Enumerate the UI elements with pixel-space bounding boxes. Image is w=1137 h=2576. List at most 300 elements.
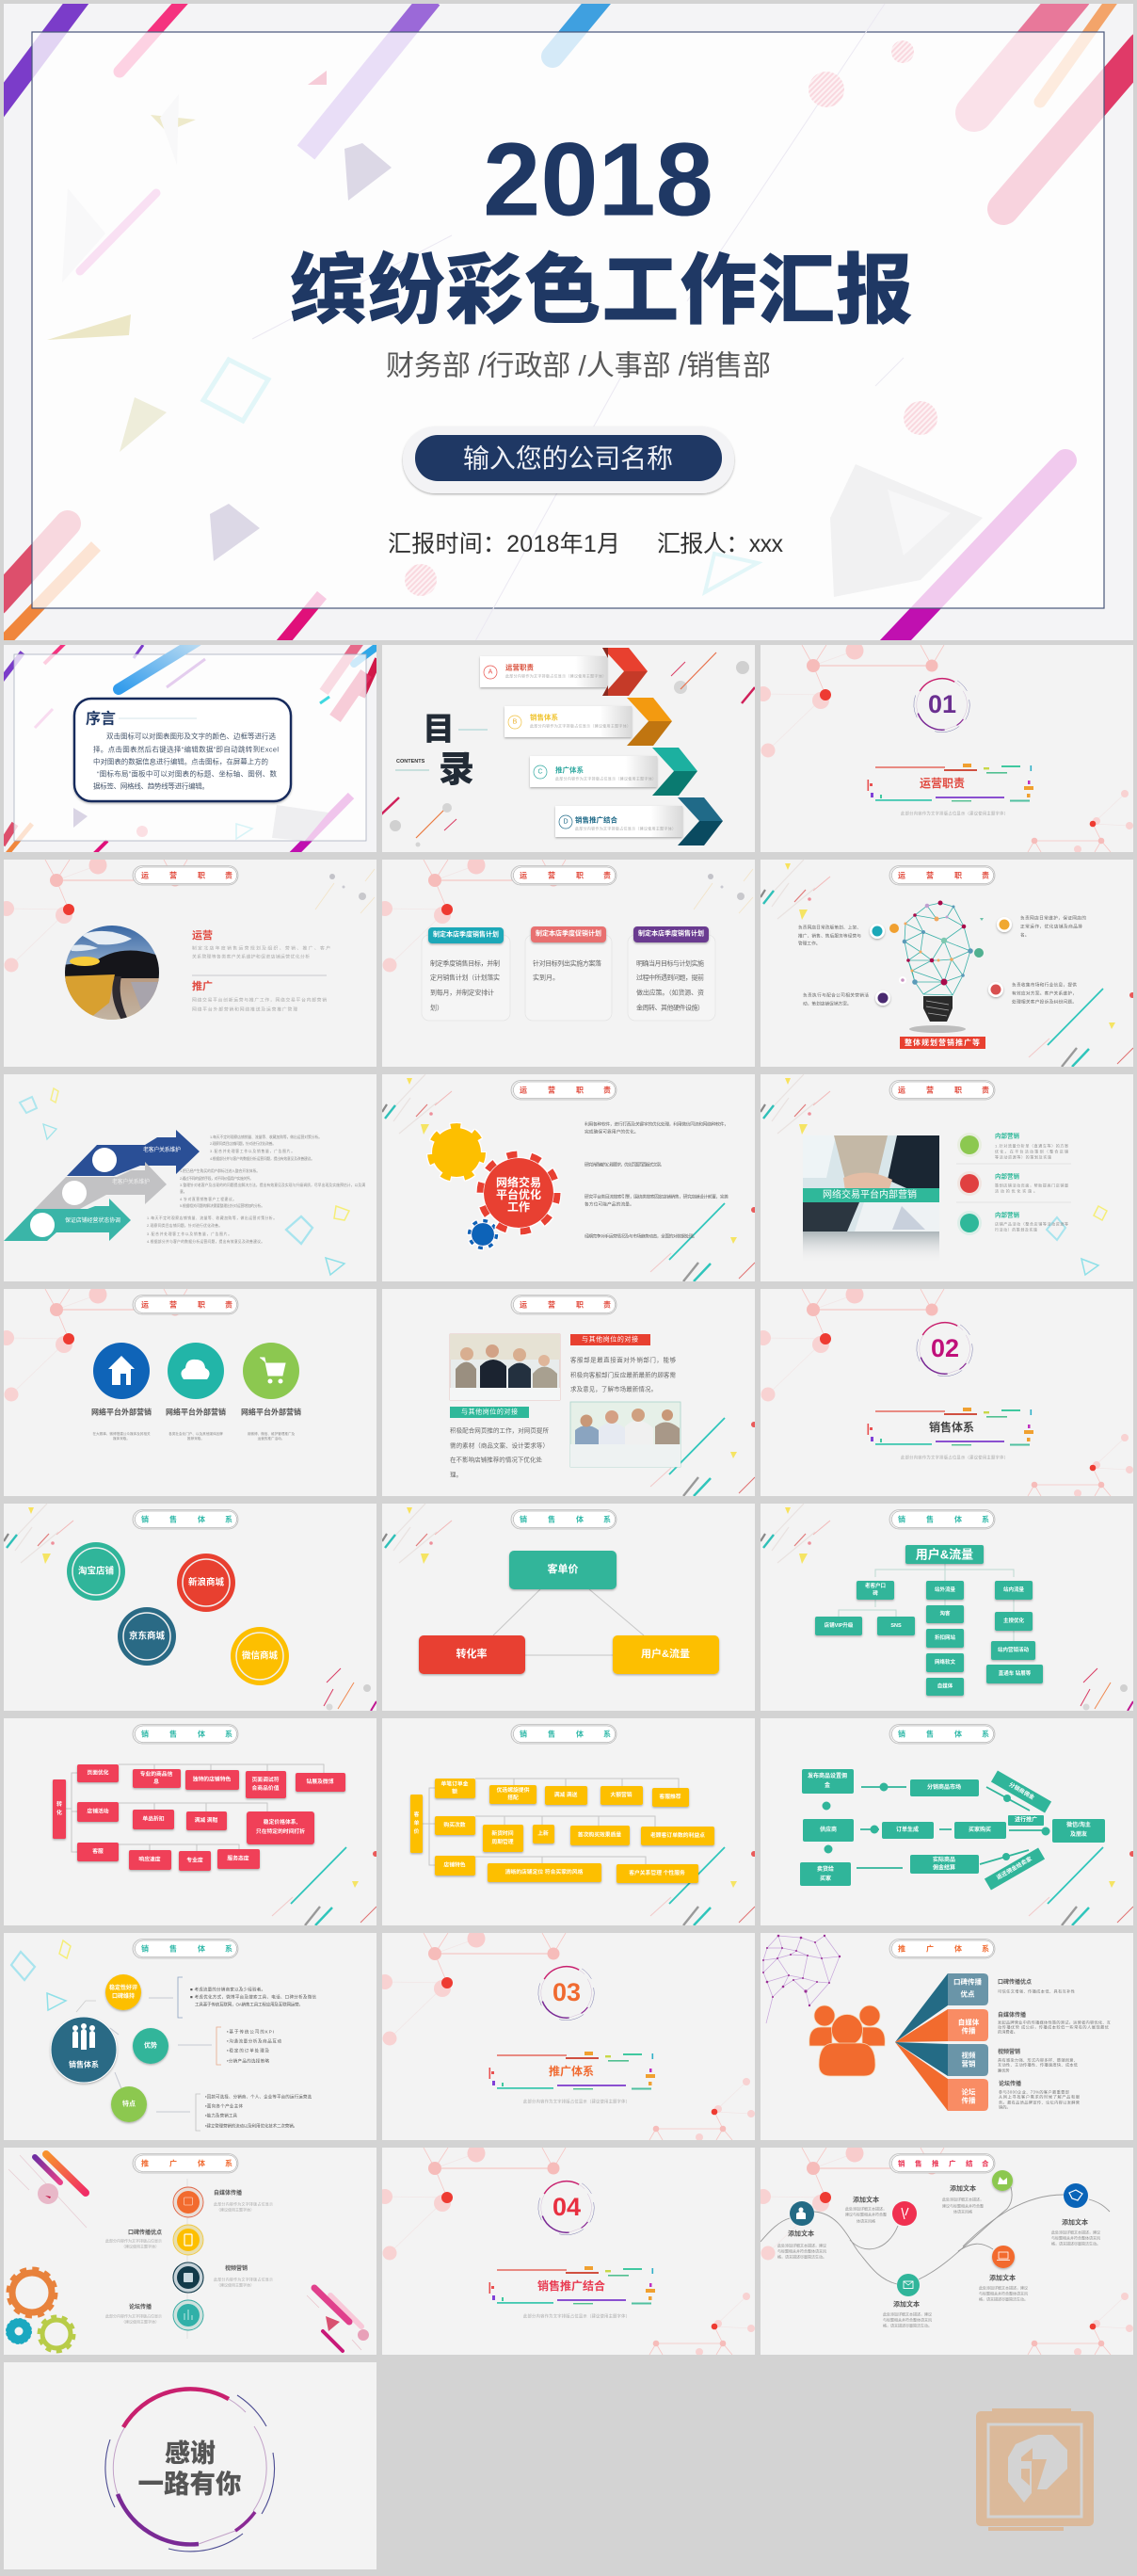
node boxes: 淘客	[939, 1610, 951, 1618]
panel: team photos slide	[382, 1289, 757, 1496]
red label	[570, 1334, 650, 1345]
arrow text blocks: 意。	[180, 1189, 187, 1194]
arrow: navy	[67, 1130, 200, 1176]
unit price node boxes: 客服推荐	[659, 1793, 681, 1800]
conversion node boxes: 页面调试符	[252, 1776, 280, 1783]
text block: reputation: 工具基于传统互联网，OA销售工具工程应用及互联网运营。	[195, 2002, 303, 2007]
heading pill: 销售体系	[520, 1729, 611, 1738]
heading: 目	[423, 712, 455, 748]
red label: 与其他岗位的对接	[582, 1335, 638, 1343]
unit price node boxes: 额	[452, 1787, 457, 1795]
unit price node boxes: 上新	[537, 1829, 549, 1837]
node boxes: 站内营销活动	[998, 1646, 1029, 1653]
panel: section 02 slide	[756, 1286, 1133, 1497]
bulb illustration	[903, 900, 973, 1033]
panel: operations and promotion slide	[0, 857, 376, 1067]
circle: wechat: 微信商城	[242, 1650, 278, 1661]
text: operations: 关系管理等各类客户关系维护和促进店铺运营优化分析	[192, 953, 310, 960]
channel descriptions: 具有感染力强、形式内容多样、肢端创意、	[998, 2056, 1078, 2064]
decorative outlines	[1047, 1206, 1107, 1275]
section note: 此部分内容作为文字排版占位显示（建议使用主题字体）	[523, 2312, 630, 2320]
root box: 用户&流量	[916, 1548, 973, 1561]
arrow text blocks: 2.观察同类目店铺问题，针对进行优化改善。	[210, 1141, 276, 1146]
heading pill: 运营职责	[520, 1299, 611, 1309]
green banner: 网络交易平台内部营销	[823, 1188, 917, 1200]
text block 6: 与标题相关并符合整体语言风	[883, 2316, 932, 2322]
circle: jd	[118, 1607, 176, 1666]
channel descriptions: 廉优势	[998, 2068, 1010, 2073]
column: cart: 用微博、微信、维护管理推广及	[248, 1431, 296, 1436]
heading pill: 销售体系	[141, 1514, 232, 1523]
unit price node boxes: 优选螺旋提供	[497, 1786, 530, 1794]
panel: thank you slide	[4, 2362, 376, 2569]
green label	[450, 1407, 529, 1418]
node 2: （建议使用主题字体）	[121, 2243, 159, 2248]
section note: 此部分内容作为文字排版占位显示（建议使用主题字体）	[523, 2098, 630, 2105]
image: snow sunset	[65, 926, 159, 1020]
column: cart: 运营的推广活动。	[258, 1436, 284, 1441]
conversion node boxes: 只在特定的时间打折	[256, 1827, 305, 1835]
red gear with label: 工作	[507, 1199, 530, 1214]
heading pill	[133, 1940, 238, 1958]
panel: three plan cards slide	[377, 857, 755, 1067]
panel: contents slide	[381, 645, 755, 852]
node: branch	[892, 2201, 917, 2226]
conversion node boxes	[53, 1764, 345, 1871]
departments: 财务部 /行政部 /人事部 /销售部	[386, 350, 771, 382]
text block 6: 此处添加详细文本描述，建议	[883, 2310, 932, 2316]
text blocks: 正常运作，优化店铺及商品排	[1020, 923, 1082, 930]
arrow: teal	[4, 1199, 131, 1241]
card 1: 制定季度销售目标，并制	[430, 958, 500, 968]
node boxes: 网络软文	[935, 1658, 955, 1666]
item D: 此部分内容作为文字排版占位显示（建议使用主题字体）	[575, 825, 676, 830]
item A: 此部分内容作为文字排版占位显示（建议使用主题字体）	[505, 672, 606, 678]
preface box: 择。点击图表然后右键选择“编辑数据”即自动跳转到Excel	[93, 744, 279, 753]
text block: reputation	[190, 1987, 316, 2007]
card 2: 制定本店季度促销计划	[536, 928, 601, 938]
flow node boxes: 分销商品市场	[927, 1783, 961, 1791]
item 1: 优化。在平台活动策划（整合店铺	[995, 1149, 1068, 1154]
text block: reputation: ■ 考虑流量的分销商家以及少经验者。	[190, 1987, 265, 1992]
section number: 03	[552, 1978, 581, 2006]
text block 1	[777, 2230, 826, 2260]
circle: wechat	[231, 1627, 289, 1685]
item A: 运营职责	[505, 663, 534, 672]
conversion node boxes: 转	[56, 1800, 62, 1808]
text block: advantages: •沟通流量分析及商品互动	[227, 2037, 282, 2045]
text block 4: 与标题相关并符合整体语言风	[1051, 2235, 1100, 2241]
node: team	[790, 2201, 814, 2226]
flow node boxes	[800, 1769, 1105, 1886]
card 1	[422, 927, 510, 1021]
fan segments	[895, 1973, 948, 2111]
connecting curves	[761, 2187, 1110, 2284]
panel: three arrows slide	[4, 1074, 376, 1281]
panel: preface slide	[1, 641, 378, 856]
text block 4: 此处添加详细文本描述，建议	[1051, 2230, 1100, 2235]
arrow: grey: 老客户关系维护	[112, 1178, 150, 1185]
channel descriptions: 视频营销	[998, 2048, 1020, 2055]
unit price node boxes: 大额营销	[610, 1791, 633, 1798]
text block: left	[450, 1425, 550, 1478]
panel: section 01 slide	[756, 642, 1133, 853]
column: house: 媒体采取。	[113, 1436, 130, 1441]
flow node boxes: 买家购买	[969, 1826, 991, 1833]
preface box: “图标布局”面板中可以对图表的标题、坐标轴、图例、数	[97, 768, 277, 778]
node 4: 此部分内容作为文字排版占位显示	[105, 2312, 162, 2318]
flow node boxes: 及朋友	[1070, 1830, 1087, 1838]
conversion node boxes: 化	[56, 1809, 62, 1816]
text block: right: 积极向客服部门反应最新最新的顾客需	[570, 1371, 676, 1378]
heading: 录	[439, 750, 474, 790]
item A: A	[488, 668, 493, 676]
node 4: （建议使用主题字体）	[121, 2318, 159, 2324]
text block 3: 体语言风格	[953, 2209, 972, 2214]
channel descriptions: 从网上寻找客户需求的时候了解产品和服	[999, 2094, 1081, 2100]
unit price node boxes: 搭配	[507, 1794, 519, 1801]
text block 6: 格，语言描述尽量简洁生动。	[883, 2322, 932, 2327]
channel box 4: 论坛	[962, 2086, 976, 2096]
text block 2: 体语言风格	[857, 2218, 875, 2224]
column: house	[91, 1343, 152, 1441]
arrow text blocks: 3.配合并处理客工作以及销售量，广告图片。	[210, 1149, 295, 1153]
heading: CONTENTS	[396, 759, 425, 765]
conversion node boxes: 合商品价值	[252, 1784, 280, 1792]
node: reputation: 稳定性好评	[109, 1984, 137, 1991]
heading pill: 销售体系	[898, 1514, 989, 1523]
text block 5: 格，语言描述尽量简洁生动。	[979, 2295, 1028, 2301]
node 4: 论坛传播	[129, 2303, 152, 2310]
node 2: 此部分内容作为文字排版占位显示	[105, 2237, 162, 2243]
column: house: 在大赛事、微博搭建公众媒体及其相关	[92, 1431, 151, 1436]
text block: left: 理。	[450, 1471, 462, 1478]
flow node boxes: 订单生成	[896, 1826, 919, 1833]
flow node boxes: 供应商	[820, 1826, 837, 1833]
channel descriptions: 互动性、主动传播性、传播速度快、成本低	[998, 2062, 1079, 2068]
channel box 2: 自媒体	[958, 2017, 980, 2026]
section number: 02	[931, 1334, 959, 1362]
box: traffic: 用户&流量	[641, 1647, 690, 1660]
section title: 运营职责	[920, 776, 965, 790]
node: chart	[992, 2170, 1013, 2191]
item C	[530, 748, 697, 796]
channel descriptions: 自媒体传播	[998, 2011, 1026, 2019]
card 2	[525, 926, 612, 1021]
node boxes: 店铺VIP升级	[825, 1621, 854, 1629]
panel: cover slide	[0, 0, 1137, 650]
text block 1: 添加文本	[788, 2230, 814, 2237]
node 3: 此部分内容作为文字排版占位显示	[214, 2277, 273, 2282]
panel: sales system mind map slide	[4, 1933, 376, 2140]
item 3: 店铺产品活动（整合店铺等活动资源等	[995, 1220, 1068, 1226]
node boxes: 老客户口	[865, 1582, 886, 1589]
heading pill: 销售体系	[898, 1729, 989, 1738]
section number: 04	[552, 2193, 581, 2221]
diagonal banner: commission: 分销商佣金	[1008, 1780, 1035, 1801]
card 3: 做出应策。（如货源、资	[636, 989, 704, 996]
flow connectors	[823, 1783, 1049, 1868]
text: promotion: 推广	[192, 979, 213, 992]
channel descriptions: 可信任文增强、传播成本低、具有互补性	[998, 1988, 1075, 1994]
text blocks: 负责网店日常改版策划、上架、	[798, 925, 861, 930]
panel: traffic tree slide	[761, 1504, 1133, 1711]
heading pill: 销售推广结合	[898, 2158, 989, 2167]
report time: 汇报时间：2018年1月	[388, 531, 620, 557]
channel descriptions: 动传播优势 成公好，传播成本较低一些常有的人展现最优	[998, 2024, 1109, 2030]
node boxes	[815, 1581, 1043, 1696]
text block 3: 建议与标题相关并符合整	[942, 2203, 984, 2209]
panel: triangle diagram slide	[382, 1504, 755, 1711]
node boxes: 自媒体	[937, 1682, 953, 1689]
arrow text blocks: 1.每天不定时观察店铺销量、流量等、收藏加购等，做出运营对策分析。	[210, 1135, 322, 1139]
text blocks: 管理工作。	[798, 940, 820, 947]
heading pill	[889, 1510, 995, 1529]
channel box 4	[948, 2079, 988, 2111]
text block: features	[205, 2094, 312, 2130]
text block: features: •回款可选择、分销商、个人、企业等平台的运行运营选	[205, 2094, 312, 2100]
heading pill	[133, 1296, 238, 1314]
text block 3	[942, 2184, 984, 2214]
card 2: 实到月。	[533, 974, 559, 981]
unit price node boxes: 满减 满送	[554, 1791, 578, 1798]
conversion node boxes: 息	[153, 1778, 159, 1785]
text block 6: 添加文本	[893, 2299, 920, 2309]
text block: advantages: •稳定的订单处理及	[227, 2047, 269, 2054]
flow node boxes: 发布商品设置佣	[808, 1772, 847, 1779]
arrow: teal: 保证店铺经营状态协调	[65, 1216, 120, 1224]
node: reputation	[105, 1974, 141, 2010]
node: advantages	[133, 2028, 168, 2064]
item B	[504, 698, 672, 746]
top left decoration	[8, 2154, 87, 2228]
conversion node boxes: 响应速度	[138, 1855, 161, 1862]
section note: 此部分内容作为文字排版占位显示（建议使用主题字体）	[901, 810, 1008, 817]
item 3: 行活动）的策划及实施	[995, 1226, 1037, 1232]
heading pill: 推广体系	[141, 2158, 232, 2167]
diagonal banner: commission	[991, 1770, 1051, 1813]
preface box: 中对图表的数据信息进行编辑。点击图标，在屏幕上方的	[93, 757, 268, 766]
yellow gear	[430, 1126, 483, 1179]
panel: sales and promotion curve slide	[756, 2145, 1133, 2356]
heading	[395, 712, 488, 790]
text blocks: 利用各种软件，进行打西及关键字的优化处理，利用微信同流和网络种软件，	[585, 1120, 729, 1128]
item D: 销售推广结合	[575, 815, 617, 825]
unit price node boxes: 单	[414, 1819, 420, 1827]
item C: C	[537, 768, 543, 776]
panel: unit price tree slide	[382, 1718, 757, 1925]
node boxes: SNS	[890, 1623, 902, 1629]
item B: 销售体系	[530, 712, 558, 721]
heading pill: 运营职责	[141, 870, 232, 879]
flow node boxes: 进行推广	[1015, 1815, 1037, 1823]
main year: 2018	[483, 122, 713, 237]
panel: three circle icons slide	[0, 1286, 376, 1496]
arrow text blocks	[147, 1135, 365, 1244]
text block 2: 添加文本	[853, 2196, 879, 2203]
channel descriptions: 论坛传播	[999, 2080, 1021, 2087]
unit price node boxes: 清晰的店铺定位 符合买家的风格	[505, 1868, 584, 1876]
node: features: 特点	[122, 2100, 136, 2107]
card 3: 制定本店季度销售计划	[638, 928, 704, 938]
text blocks: 完成确保可靠用户的优化。	[585, 1128, 639, 1135]
item D: D	[563, 819, 568, 825]
panel: word of mouth channels slide	[761, 1933, 1133, 2140]
column: cloud: 推荐采取。	[187, 1436, 204, 1441]
heading pill	[133, 2154, 238, 2173]
unit price node boxes: 单笔订单金	[440, 1779, 469, 1787]
arrow: grey	[35, 1162, 167, 1209]
text block 2: 此处添加详细文本描述，	[845, 2205, 887, 2211]
decorative dots and strokes	[381, 652, 755, 847]
red caption: 整体规划营销推广等	[905, 1038, 981, 1047]
green label: 与其他岗位的对接	[461, 1407, 518, 1416]
card 1: 定月销售计划（计划落实	[430, 974, 500, 981]
conversion node boxes: 钻展及微博	[307, 1778, 334, 1785]
item 1	[957, 1132, 1068, 1160]
text blocks: 推广、销售、售后服务等经营与	[798, 932, 861, 940]
gears	[7, 2269, 73, 2352]
card 3: 金周转、其他硬件设施）	[636, 1004, 704, 1011]
box: conversion: 转化率	[456, 1647, 488, 1660]
node 2	[105, 2225, 203, 2255]
card 3	[628, 926, 715, 1021]
arrow: navy: 老客户关系维护	[143, 1146, 181, 1153]
channel descriptions: 参与3000企业、73%的客户最重要部	[999, 2088, 1069, 2096]
network graphic	[762, 1935, 841, 2023]
icon: watermark stamp	[976, 2408, 1094, 2531]
node 3: （建议使用主题字体）	[216, 2282, 254, 2288]
blue bar	[119, 641, 197, 689]
text block 4	[1051, 2218, 1100, 2246]
section title: 销售体系	[929, 1420, 974, 1434]
heading pill	[511, 1296, 617, 1314]
channel box 2	[948, 2009, 988, 2041]
text block: advantages: •基于传统公司的KPI	[227, 2028, 274, 2036]
text block 5	[979, 2273, 1028, 2301]
column: cloud	[166, 1343, 226, 1441]
arrow text blocks: 2.观察同类目店铺问题，针对进行优化改善。	[147, 1223, 222, 1228]
text block 4: 添加文本	[1062, 2218, 1088, 2226]
card 1: 到每月，并制定安排计	[430, 989, 494, 996]
text block: left: 积极配合网页推的工作，对网页提所	[450, 1425, 550, 1435]
column: cart: 网络平台外部营销	[241, 1407, 301, 1416]
node boxes: 碑	[873, 1589, 878, 1597]
flow node boxes: 卖货给	[817, 1865, 834, 1873]
channel descriptions: 口碑传播优点	[998, 1978, 1032, 1986]
node 1: 此部分内容作为文字排版占位显示	[214, 2201, 273, 2207]
column: cloud: 各类社会化门户、以及其他媒体品牌	[168, 1431, 223, 1436]
text block: right	[570, 1356, 676, 1393]
conversion node boxes: 店铺活动	[87, 1808, 109, 1815]
text block: left: 在不影响店铺推荐的情况下优化处	[450, 1456, 542, 1463]
blue gear	[469, 1220, 497, 1248]
root box	[905, 1545, 984, 1564]
diagonal colour bars	[0, 0, 1137, 650]
item C: 推广体系	[555, 765, 584, 774]
card 3: 明确当月目标与计划实施	[636, 958, 704, 968]
node 3	[173, 2262, 273, 2293]
conversion node boxes: 页面优化	[87, 1768, 109, 1776]
panel: sales channel circles slide	[4, 1504, 376, 1711]
red gear with label	[480, 1154, 557, 1232]
flow node boxes: 金	[825, 1781, 830, 1789]
node: handshake	[1064, 2183, 1088, 2208]
box: unit price: 客单价	[548, 1562, 578, 1575]
channel box 1: 口碑传播	[953, 1977, 982, 1987]
column: house: 网络平台外部营销	[91, 1407, 152, 1416]
text blocks	[798, 915, 1086, 1007]
unit price node boxes: 客	[414, 1811, 420, 1818]
text blocks: 研究消费者的心理要求，优化页面页面版式文案。	[585, 1162, 665, 1167]
company name button: 输入您的公司名称	[463, 444, 673, 473]
flow node boxes: 微信/淘主	[1066, 1821, 1091, 1828]
arrow text blocks: 4.针对直营销售客户工程建议。	[180, 1197, 236, 1201]
conversion node boxes: 服务态度	[227, 1855, 249, 1862]
box: traffic	[613, 1635, 719, 1674]
box: unit price	[509, 1551, 617, 1589]
heading pill: 推广体系	[898, 1943, 989, 1953]
arrow text blocks: 2.通过不同的促销手段，对不同价值用户实施关怀。	[180, 1176, 253, 1181]
text: operations: 制定北店年度销售运营规划及组织、营销、推广、客户	[192, 945, 330, 951]
item 3: 内部营销	[995, 1211, 1020, 1218]
node boxes: 主搜优化	[1003, 1617, 1024, 1624]
text block 4: 格，语言描述尽量简洁生动。	[1051, 2241, 1100, 2246]
item 3	[957, 1211, 1068, 1235]
panel: distribution flow slide	[761, 1718, 1135, 1925]
conversion node boxes: 单品折扣	[142, 1815, 165, 1823]
text blocks: 动，策划店铺促销方案。	[803, 1000, 852, 1007]
node 3: 视频营销	[225, 2264, 248, 2272]
preface box	[74, 699, 291, 801]
thanks text: 感谢	[165, 2439, 216, 2468]
red gear with label: 平台优化	[496, 1187, 541, 1201]
image: handshake photo	[803, 1135, 939, 1264]
panel: section 03 slide	[377, 1930, 755, 2141]
node: laptop	[992, 2246, 1015, 2268]
item 1: 1.针对流量分析单（直通车等）的方案	[995, 1143, 1068, 1149]
conversion node boxes: 专业的商品信	[140, 1770, 173, 1778]
arrow text blocks: 4.根据部分并与客户的数据分析运营问题，提出有效意见及改善建议。	[210, 1156, 314, 1161]
section number: 01	[928, 690, 956, 718]
heading pill	[511, 1510, 617, 1529]
conversion node boxes: 客服	[92, 1847, 104, 1855]
bottom right decoration	[307, 2288, 369, 2351]
text blocks: 处理相关客户投诉及纠纷问题。	[1012, 998, 1077, 1006]
item 2: 活动的优化实施。	[995, 1188, 1037, 1194]
decorative outlines	[11, 1940, 96, 2012]
text: promotion	[192, 979, 327, 1013]
thanks text	[137, 2439, 241, 2499]
arrow text blocks: 1.每天不定时观察店铺销量、流量等、收藏加购等，做出运营对策分析。	[147, 1216, 277, 1220]
item 2: 策划店铺活动页面，帮助提高门店销量	[995, 1183, 1068, 1188]
unit price node boxes: 客户关系管理 个性服务	[629, 1869, 685, 1876]
text block 2	[845, 2196, 887, 2224]
green banner	[803, 1188, 939, 1202]
channel box 3: 营销	[962, 2058, 976, 2068]
text block 6	[883, 2299, 932, 2327]
main title: 缤纷彩色工作汇报	[290, 249, 913, 333]
text block: reputation: ■ 考虑优化方式，微博平台及搜索工具、电话、口碑分析及微信	[190, 1994, 316, 2000]
text block: features: •建立管理营销的流动以及利用优化技术二次营销。	[205, 2122, 297, 2130]
heading pill	[889, 866, 995, 885]
preface box: 双击图标可以对图表图形及文字的颜色、边框等进行选	[106, 731, 277, 740]
heading pill: 运营职责	[898, 870, 989, 879]
panel: light bulb slide	[761, 860, 1135, 1067]
unit price node boxes: 周期管理	[491, 1838, 514, 1845]
heading pill	[511, 866, 617, 885]
column: cart	[241, 1343, 301, 1441]
